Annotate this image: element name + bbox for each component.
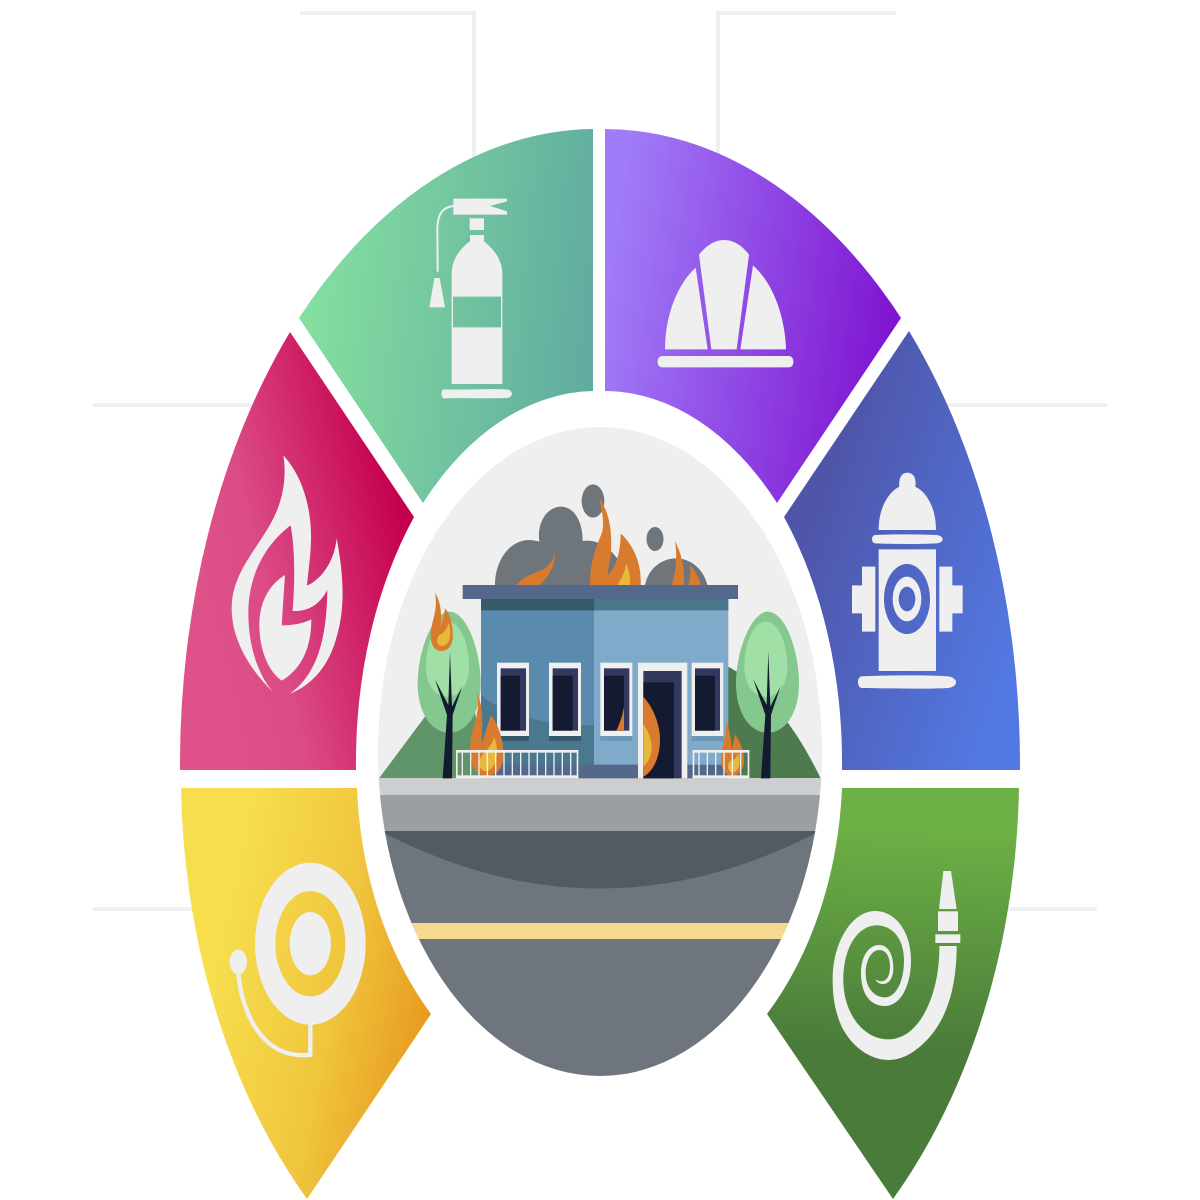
tree flame (431, 593, 453, 651)
icon: hard hat (658, 240, 793, 367)
icon: alarm bell (230, 863, 366, 1055)
connector lines (93, 13, 1107, 909)
icon: flame (232, 455, 343, 694)
panel: extinguisher segment (299, 129, 593, 503)
smoke (495, 484, 707, 585)
building and surroundings (418, 484, 799, 778)
panel: hydrant segment (784, 331, 1020, 770)
windows (497, 663, 723, 741)
icon: fire extinguisher (429, 199, 512, 398)
railing left (456, 750, 578, 778)
icon: fire hose (833, 871, 960, 1060)
building walls (481, 610, 594, 726)
tree left (418, 612, 481, 778)
roof flames (517, 498, 701, 585)
roof (463, 585, 738, 599)
railing right (693, 750, 749, 778)
street (370, 778, 830, 1081)
panel: flame segment (180, 332, 414, 770)
panel: helmet segment (605, 129, 901, 503)
tree right (736, 612, 799, 778)
center illustration: burning building (370, 420, 830, 1081)
panel: hose segment (767, 788, 1019, 1199)
ground flame right (721, 719, 744, 776)
ground flame left (470, 692, 503, 776)
icon: fire hydrant (852, 473, 963, 689)
panel: alarm bell segment (181, 788, 431, 1199)
hills (379, 667, 821, 778)
door (638, 663, 687, 778)
